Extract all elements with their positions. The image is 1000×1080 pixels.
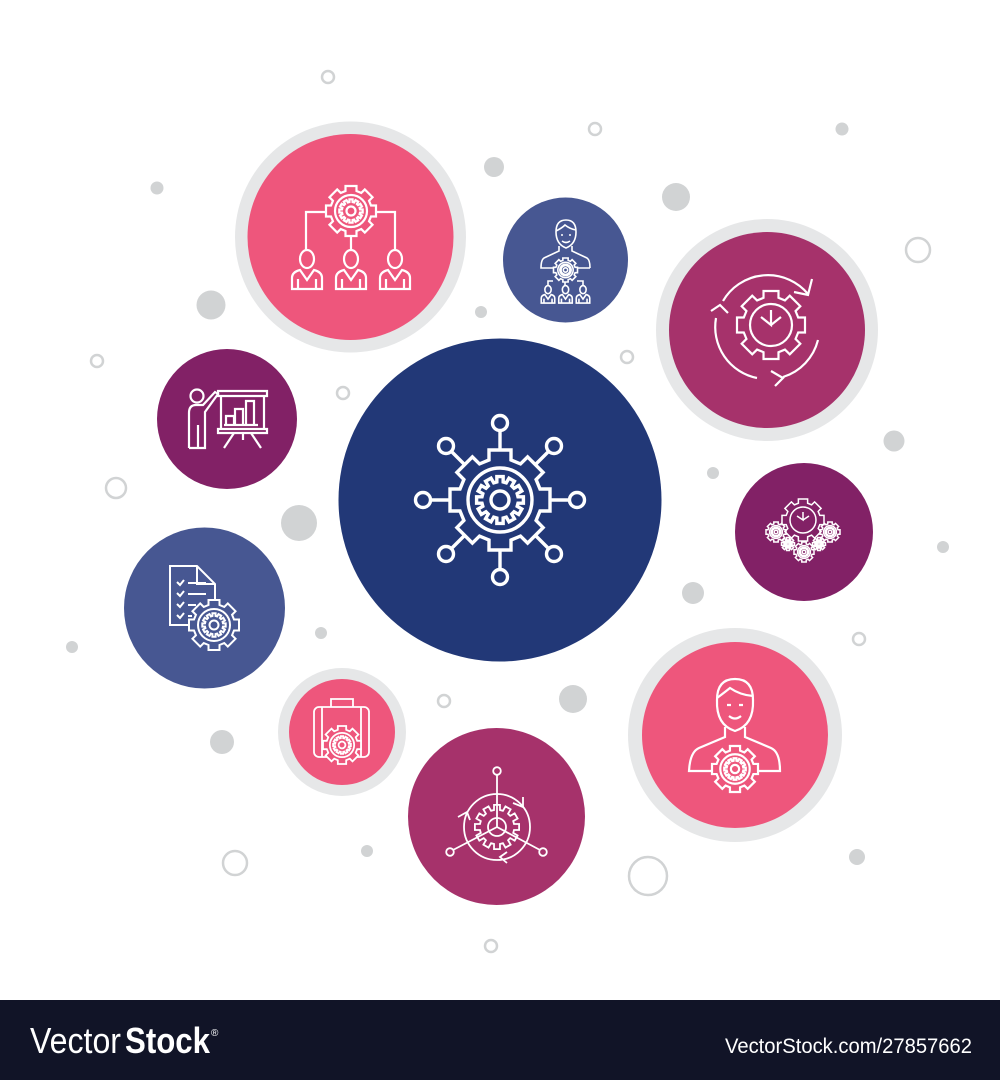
icon: gear hub network (416, 416, 584, 584)
icon: document with gear (170, 566, 239, 650)
icon: clock gear cluster (766, 499, 840, 562)
icon: gear with three spokes and cycle arrows (446, 767, 547, 863)
footer bar (0, 1000, 1000, 1080)
icon: clock gear with cycle arrows (711, 275, 818, 386)
panel: central bubble with hub gear (338, 338, 662, 662)
panel: left blue bubble (124, 528, 285, 688)
footer image id: VectorStock.com/27857662 (725, 1035, 972, 1058)
panel: right purple bubble (735, 463, 873, 601)
panel: small blue bubble (503, 198, 628, 322)
panel: bottom crimson bubble (408, 728, 585, 905)
panel: left purple bubble (157, 349, 297, 489)
footer logo: Vector (30, 1020, 121, 1061)
icon: man with gear (689, 679, 780, 792)
icon: gear with three people (292, 186, 410, 289)
footer logo (30, 1020, 219, 1061)
icon: presenter with chart board (189, 390, 267, 448)
panel: right crimson bubble (656, 219, 878, 441)
footer logo: Stock (125, 1020, 211, 1061)
icon: briefcase with gear (314, 699, 369, 764)
decorative ring dots (91, 71, 930, 952)
footer logo: ® (211, 1028, 219, 1039)
panel: bottom-right pink bubble (628, 628, 842, 842)
panel: small pink bubble with grey ring (278, 668, 406, 796)
panel: top-left pink bubble (235, 122, 466, 352)
icon: manager with gear and team (541, 220, 590, 303)
decorative filled dots (66, 122, 949, 865)
